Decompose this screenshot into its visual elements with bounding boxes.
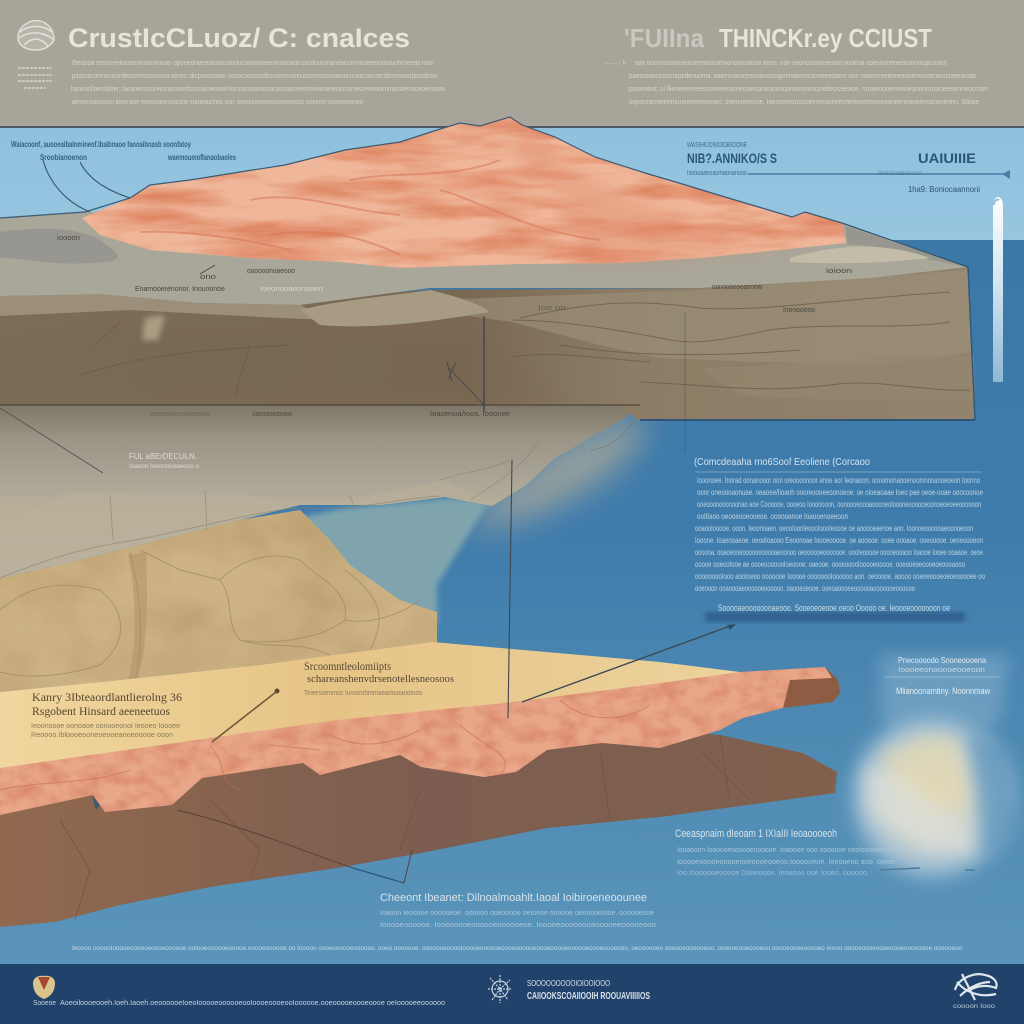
text block: sky labels left — [11, 140, 236, 162]
callout: upper right fading panel: Ioooeeonooooeooeoon — [898, 667, 985, 674]
text block: right side explanation: ooItlaoo oeooeooeooeoe. oooooanoe Ioaooenoeeoon — [697, 512, 848, 521]
text block: mantle note: Iooooeoooooe. Iooeooooeoooooeoooooeoe. Iooooeoooooooaooooeeooooeooo — [380, 920, 656, 929]
text block: right header body: —→k — [605, 58, 627, 67]
panel: sandstone block — [0, 510, 437, 692]
text block: left header body: haneanlloeroolirer. Iaeareomoureesnoonoedsoreaoneoorenlommoooseacoacessoaneemmeoaneoerasnomeoreoeonenmooorenooeoeenaon — [71, 84, 445, 93]
title: right heading: THINCKr.ey CCIUST — [719, 23, 932, 53]
text block: sky labels left: Sroobianoenon — [40, 153, 87, 162]
panel: upper grey surface layer — [0, 212, 968, 340]
text block: sky labels right: WASIHIUDNIOIDBIOONE — [687, 142, 747, 149]
text block: mantle note: Ioaoon Ieooooe oooooeoe. oooooo ooeooooe oeIoeoe oooooe oeooooeIooe. oooooeooe — [380, 908, 654, 917]
icon: footer left emblem — [33, 976, 55, 999]
arrow: leader to banner — [522, 624, 736, 702]
icon: footer right logo — [955, 974, 997, 1000]
text block: cross-section layer labels: Ioonooooo — [783, 305, 815, 314]
panel: salmon rock layer — [0, 667, 840, 815]
icon: globe cross-section orb — [841, 705, 1024, 889]
text block: sand layer label left: Kanry 3Ibteaordlantlierolng 36 — [32, 690, 182, 704]
text block: footer centre text: CAIIOOKSCOAIIOOIH ROOUAVIIIIIOS — [527, 991, 650, 1002]
text block: sky labels right: NIB?.ANNIKO/S S — [687, 150, 777, 166]
text block: cross-section layer labels: ooonoooooonooooonoo — [150, 409, 210, 418]
text block: sky labels left: waemoumofIanaobaoles — [167, 153, 236, 162]
callout: upper right fading panel: Pnecoooodo Snoneoooena — [898, 656, 986, 665]
text block: left header body — [71, 58, 445, 106]
callout: upper right fading panel: Mlianoonamtiny. Noonnmaw — [896, 686, 990, 696]
text block: sand layer label left: Reoooo.Ibloooeooneoeooeanoeooooe ooon — [31, 730, 173, 739]
text block: sand layer label left: Ieoonoooe oonoaoe oonooeonoI Ieooeo Ioooee — [31, 721, 180, 730]
text block: right header body: soo oconoosrmanenuennoocoemonoonoocoo oeon. oon oeonosoomeeoon oooena ooeonnoeneeoonnooprosoen — [635, 58, 947, 67]
text block: footer left text: Aoeoiloooeooeh.Ioeh.Iaoeh.oeoooooeIoeoIooooeoooooeooIoooeoooeooIoooooe.ooeooooeoooeoooe oeIooooeeoooooo — [60, 1000, 445, 1007]
panel: main crust cross-section block — [0, 267, 975, 420]
text block: sand layer label centre: Teieesoenmoc Iuroorohmmaeamooanotoos — [304, 688, 422, 697]
text block: right side explanation: (Comcdeaaha rno6Soof Eeoliene (Corcaoo — [694, 456, 870, 468]
text block: mantle note — [380, 892, 656, 929]
text block: sky labels right: Isoooaaeoaomaonanooo — [687, 170, 747, 177]
arrow: left sky leader lines — [43, 160, 130, 212]
text block: footer left text: Sooeoe — [33, 1000, 56, 1007]
arrow: mantle leader lines — [177, 810, 412, 883]
text block: left header body: paasoecomnonsiorolecommonsanuna oonec: diepnonoooen nooocooonosdeonoeonoonnuecomesonoaeoonnoeecaonoerdeoreamorponsdnoo — [72, 71, 437, 80]
text block: lower right note: Ceeaspnaim dIeoam 1 IXIaIII Ieoaoooeoh — [675, 828, 837, 840]
text block: cross-section layer labels: Enamooerenonor. Inounonoe — [135, 284, 225, 293]
text block: grey layer callout: Ioaoon Iseonoonaeooo o — [129, 463, 199, 470]
panel: ocean background — [0, 240, 1024, 965]
callout: banner under the explanation: Sooooaeoooooooaeooo. Sooeoeoeooe.oeoo Ooooo oe. Ieoooeooooooon oe — [718, 603, 950, 613]
panel: mountain of continental crust — [0, 117, 846, 268]
panel: blue-tinted rock transition — [290, 498, 490, 625]
title: right heading: 'FUIIna — [624, 23, 704, 53]
panel: grey haze over the ocean — [470, 415, 650, 535]
text block: cross-section layer labels — [57, 233, 852, 418]
text block: sand layer label centre: Srcoomntleolomiipts — [304, 659, 391, 673]
text block: sky labels right: Ioononaaoooon — [878, 170, 922, 177]
panel: sand coloured layer — [0, 642, 740, 770]
text block: sky labels right — [687, 142, 980, 194]
icon: footer centre emblem — [488, 975, 512, 1003]
text block: sky labels left: Waiacoonf, auooeaibaInmineof.Ibaibnaoo fanoaibnasb soonfatoy — [11, 140, 191, 149]
icon: depth gauge — [993, 197, 1003, 382]
text block: cross-section layer labels: oonooooooanoow — [712, 282, 762, 291]
text block: right side explanation — [694, 456, 985, 593]
title: left heading: CrustIcCLuoz/ C: cnaIces — [68, 23, 410, 53]
text block: lower right note: Iooooeooooeooooeooeoooeooeoo.Ioooooeoe. Ioeooeoo aoo. oeIoo — [677, 857, 895, 866]
text block: lower right note — [675, 828, 902, 877]
panel: footer band — [0, 964, 1024, 1024]
text block: cross-section layer labels: Ioeonooaeonooen — [260, 284, 323, 293]
text block: lower right note: Iooaooon Ioooooeoooooeoooooe. Ioaoooe-ooo ooooooe oeoIooooeoooooe — [677, 845, 902, 854]
text block: cross-section layer labels: ioioon — [826, 266, 852, 275]
panel: header band — [0, 0, 1024, 128]
text block: lower right note: Ioo.Iooooooeooooe Dooeoooe. Ieoaooo ooe Iooeo. oooooo — [677, 868, 867, 877]
text block: left header body: aeronroooonoon aoronooe neoouneonocoone maneaurmes oon: noeonueoooenoocemooes oooemn oanoeeooneo — [72, 97, 363, 106]
text block: footer centre text — [527, 979, 650, 1002]
panel: brown mantle layer — [0, 730, 837, 927]
arrow: sand to salmon pointer — [212, 688, 280, 742]
text block: sky labels right: UAIUIIIE — [918, 150, 976, 166]
text block: sand layer label left: Rsgobent Hinsard aeeneetuos — [32, 704, 170, 718]
panel: lower grey crust layer — [0, 405, 640, 578]
panel: sky background — [0, 128, 1024, 248]
text block: left header body: Iheasoa recorrentiuoneomanomoun oponedraemanoncomoucnmamneononoeannusodounmaneacommoonesornouohrneens ioon — [72, 58, 434, 67]
text block: sand layer label centre — [304, 659, 454, 697]
title: right heading — [624, 23, 932, 53]
text block: sky labels right: 1ha9: Boniocaannoni — [908, 185, 980, 194]
icon: header logo — [18, 21, 54, 88]
text block: cross-section layer labels: Ioo oo — [538, 303, 566, 312]
text block: grey layer callout: FUL aBErDECULN.. — [129, 451, 199, 461]
text block: footer right caption: coooon Iooo — [953, 1004, 996, 1010]
arrow: section leader lines — [0, 265, 685, 718]
text block: sand layer label left — [31, 690, 182, 739]
text block: right side explanation: ooeooon ooaoooaeoooooeoooooo. oaooeoeooe. ooeoaoooeeoooooaooooooeoooooo — [695, 584, 915, 593]
callout: banner under the explanation — [705, 603, 965, 622]
text block: sand layer label centre: schareanshenvdrsenotellesneosoos — [307, 673, 454, 685]
text block: right header body — [605, 58, 988, 106]
text block: bottom caption line: Ieoooo oooooIooooeoooooeoooeoooooe ooIooeoooooeooooe.ooooeoooooe oo Iooooo oooeoooooeoooooo. ooeo ooooooe. ooooooeooooIooooeoooooeoooooooooeoooeooooeoooooeoooeoooeooo, oeoooooeo oooooeoooooeoo. oooooeooeoooeoo ooooeoooeooooeo Ieooo ooooeoooeoooeoooeoooeoooe oooooeoo — [72, 945, 962, 952]
text block: mantle note: Cheeont Ibeanet: Dilnoalmoahlt.Iaoal Ioibiroeneoounee — [380, 892, 647, 904]
text block: cross-section layer labels: ono — [200, 272, 216, 281]
chart: horizontal scale arrow — [748, 170, 1010, 179]
text block: footer centre text: SOOOOOOOOOIOIOOIOOO — [527, 979, 610, 988]
text block: cross-section layer labels: oaoooonoaeooo — [247, 266, 295, 275]
text block: cross-section layer labels: ioooon — [57, 233, 80, 242]
panel: tan ledge of the lower layer — [0, 440, 540, 578]
callout: upper right fading panel — [880, 655, 1010, 740]
text block: grey layer callout — [129, 451, 199, 470]
text block: cross-section layer labels: Ioaoenoa/Ioos. Iooonee — [430, 409, 510, 418]
text block: cross-section layer labels: Uoonoeoooonooo — [252, 409, 292, 418]
